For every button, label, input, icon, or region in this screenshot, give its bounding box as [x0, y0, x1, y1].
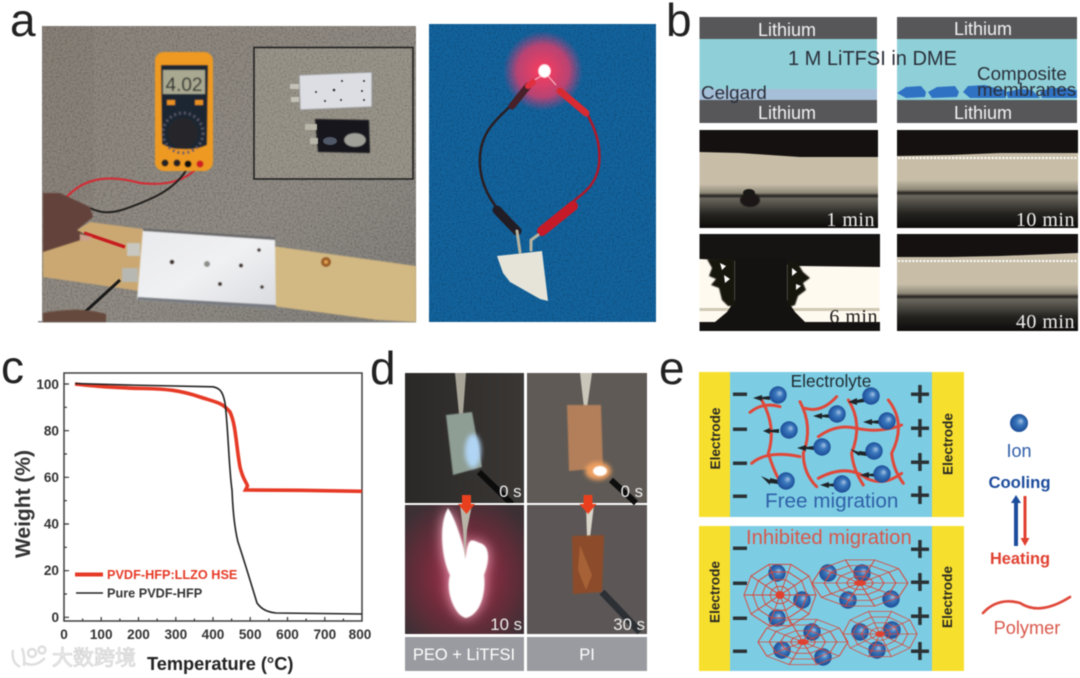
multimeter	[155, 52, 213, 171]
panel b: cell schematic with Celgard: Lithium	[758, 20, 816, 40]
panel e: free migration state: Electrode	[708, 407, 723, 469]
panel b: cell schematic with Celgard: Celgard	[701, 82, 767, 103]
photo: PI at 30 s intact: 30 s	[613, 615, 645, 634]
polymer chains	[750, 397, 903, 487]
panel b: cell schematic with composite membranes: membranes	[977, 79, 1076, 100]
panel b: cell schematic with composite membranes: Lithium	[954, 19, 1012, 39]
legend: polymer: Polymer	[994, 618, 1060, 638]
legend: cooling and heating arrows: Heating	[990, 550, 1050, 568]
legend	[75, 568, 237, 600]
photo: PI at 30 s intact	[527, 505, 647, 634]
panel label d: d	[370, 342, 396, 394]
hands	[43, 193, 106, 322]
test leads	[64, 165, 200, 312]
x tick labels: 100	[90, 627, 113, 642]
legend: cooling and heating arrows: Cooling	[988, 473, 1051, 492]
legend: PVDF-HFP:LLZO HSE	[107, 568, 237, 582]
y tick labels: 80	[44, 424, 59, 438]
panel e: free migration state: Electrode	[940, 413, 956, 475]
panel e: free migration state	[699, 371, 964, 517]
legend: polymer	[983, 597, 1070, 638]
photo: PEO at 0 s: 0 s	[499, 482, 522, 501]
micrograph: Celgard at 1 min: 1 min	[826, 209, 875, 231]
panel e: inhibited migration state: Electrode	[940, 566, 955, 628]
panel e: inhibited migration state	[699, 526, 964, 671]
curve: Pure PVDF-HFP	[75, 384, 362, 614]
micrograph: Celgard at 6 min with dendrites	[700, 234, 880, 331]
panel b: cell schematic with composite membranes	[897, 17, 1077, 123]
photo: PEO at 10 s burning: 10 s	[490, 615, 522, 634]
electrolyte label: 1 M LiTFSI in DME	[788, 48, 957, 70]
x tick labels: 800	[349, 627, 371, 642]
trapped ions	[768, 564, 901, 666]
x tick labels: 0	[60, 627, 68, 642]
panel b: cell schematic with composite membranes: Composite	[977, 63, 1067, 84]
x tick labels: 600	[276, 627, 299, 642]
plot frame and ticks	[64, 373, 362, 621]
panel label e: e	[659, 342, 685, 394]
legend: cooling and heating arrows	[988, 473, 1051, 568]
panel d: flame test: PEO + LiTFSI	[413, 646, 515, 664]
panel b: cell schematic with Celgard: Lithium	[758, 103, 816, 123]
x tick labels: 700	[313, 627, 336, 642]
x tick labels	[60, 627, 371, 642]
material labels	[405, 637, 524, 671]
pouch cell with holes	[122, 228, 276, 309]
panel d: flame test: PI	[579, 646, 595, 664]
dendrite	[707, 259, 810, 308]
panel b: cell schematic with Celgard	[700, 17, 877, 123]
TGA chart	[12, 373, 371, 674]
ions with arrows	[753, 386, 896, 493]
y tick labels: 40	[44, 516, 59, 532]
y tick labels: 100	[36, 377, 59, 392]
panel a: photo of battery and multimeter	[38, 26, 416, 322]
axis titles: Weight (%)	[12, 450, 35, 558]
red arrows	[458, 495, 475, 514]
composite membrane blocks	[897, 85, 1077, 98]
micrograph: composite at 40 min	[897, 234, 1078, 333]
clips and wires	[480, 82, 599, 252]
panel a: LED lit by cell on blue cloth	[429, 24, 656, 322]
micrograph: composite at 10 min: 10 min	[1016, 209, 1075, 231]
inset: cell before and after	[254, 48, 413, 179]
legend: Pure PVDF-HFP	[107, 586, 203, 600]
micrograph: Celgard at 6 min with dendrites: 6 min	[829, 306, 878, 328]
micrograph: composite at 40 min: 40 min	[1016, 311, 1075, 333]
charges	[733, 385, 929, 504]
TGA chart: Temperature (°C)	[147, 654, 293, 674]
photo: PEO at 10 s burning	[405, 505, 524, 634]
wooden plank	[43, 222, 416, 322]
legend: ion	[1006, 414, 1032, 461]
spider-web polymer networks	[744, 560, 917, 665]
x tick labels: 200	[127, 627, 150, 642]
panel e: inhibited migration state: Electrode	[708, 561, 722, 623]
photo: PI at 0 s: 0 s	[621, 482, 643, 501]
y tick labels	[36, 377, 59, 625]
multimeter: 4.02	[166, 75, 202, 96]
photo: PI at 0 s	[527, 373, 647, 503]
panel b: cell schematic with composite membranes: Lithium	[954, 103, 1012, 123]
panel e: free migration state: Free migration	[765, 490, 898, 512]
LED glow	[503, 31, 583, 111]
x tick labels: 300	[164, 627, 187, 642]
panel d: flame test	[405, 373, 647, 671]
y tick labels: 0	[51, 610, 59, 625]
panel label c: c	[1, 341, 24, 393]
micrograph: composite at 10 min	[897, 130, 1078, 231]
legend: ion: Ion	[1006, 441, 1032, 461]
micrograph: Celgard at 1 min	[700, 130, 878, 231]
charges	[733, 540, 929, 660]
panel e: inhibited migration state: Inhibited migration	[746, 527, 912, 549]
x tick labels: 500	[239, 627, 262, 642]
y tick labels: 20	[44, 563, 59, 578]
x tick labels: 400	[202, 627, 224, 642]
watermark: 大数跨境	[52, 647, 136, 670]
watermark	[13, 646, 136, 670]
panel e: free migration state: Electrolyte	[791, 371, 871, 391]
small cell sheet	[497, 251, 548, 301]
curve: PVDF-HFP:LLZO HSE	[75, 384, 362, 491]
photo: PEO at 0 s	[405, 373, 524, 504]
y tick labels: 60	[44, 470, 59, 485]
